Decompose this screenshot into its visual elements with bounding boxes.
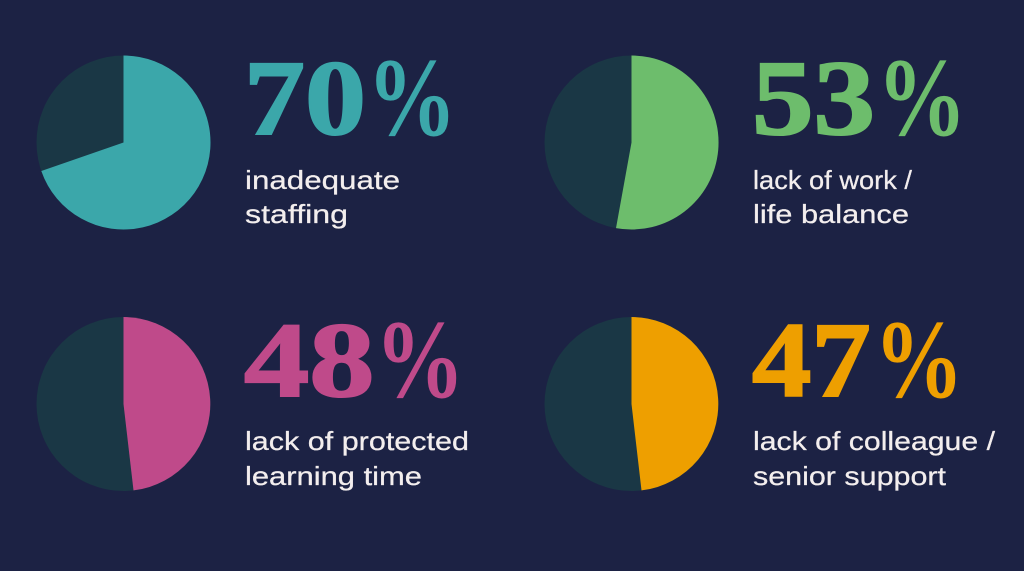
label: lack of colleague / senior support: lack of colleague / <box>753 426 996 456</box>
panel: 47% lack of colleague / senior support <box>544 298 996 491</box>
pie chart: 47% <box>544 317 718 491</box>
figure: 53%: % <box>877 36 967 159</box>
pie chart: 48% <box>36 317 210 491</box>
figure: 70% <box>244 36 457 159</box>
figure: 47% <box>752 298 964 421</box>
figure: 70%: 70 <box>244 39 366 157</box>
figure: 53% <box>752 36 967 159</box>
label: lack of work / life balance <box>753 165 913 229</box>
label: lack of protected learning time <box>245 426 469 491</box>
pie chart: 70% <box>36 56 210 230</box>
label: inadequate staffing: inadequate <box>245 165 400 195</box>
label: lack of work / life balance: lack of work / <box>753 165 913 195</box>
panel: 70% inadequate staffing <box>36 36 457 229</box>
figure: 47%: % <box>874 298 964 421</box>
figure: 47%: 47 <box>752 301 871 420</box>
label: inadequate staffing <box>245 165 400 229</box>
label: lack of protected learning time: lack of protected <box>245 426 469 456</box>
label: inadequate staffing: staffing <box>245 199 348 229</box>
label: lack of colleague / senior support <box>753 426 996 491</box>
figure: 48%: % <box>375 298 465 421</box>
label: lack of work / life balance: life balance <box>753 199 909 229</box>
label: lack of protected learning time: learning time <box>245 461 422 491</box>
panel: 48% lack of protected learning time <box>36 298 469 491</box>
figure: 48%: 48 <box>244 301 375 419</box>
panel: 53% lack of work / life balance <box>544 36 967 229</box>
label: lack of colleague / senior support: senior support <box>753 461 947 491</box>
figure: 70%: % <box>367 36 457 159</box>
figure: 53%: 53 <box>752 38 875 157</box>
figure: 48% <box>244 298 465 421</box>
pie chart: 53% <box>544 55 719 230</box>
